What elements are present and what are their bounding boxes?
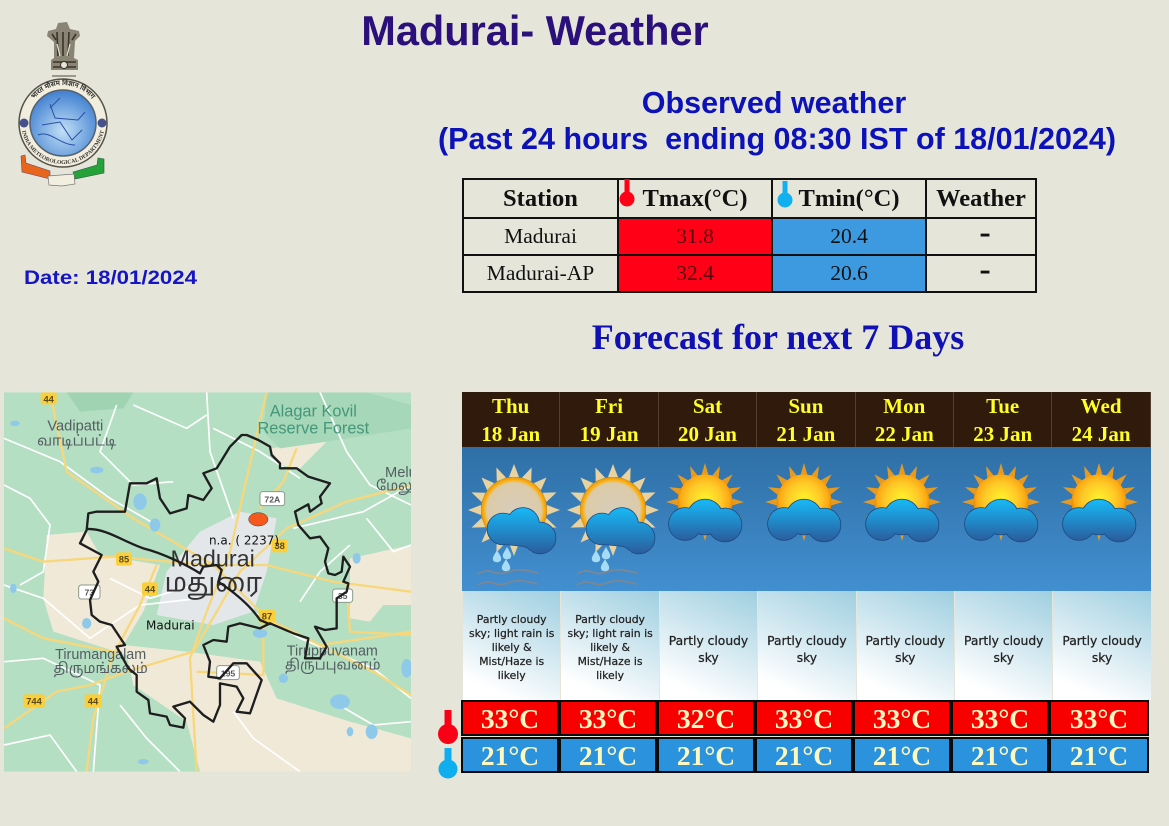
icon: Tue sun and cloud [962,463,1040,542]
max temperature: Sat: 32°C [677,702,735,734]
map of Madurai district: 195 [221,668,235,678]
row: Madurai [462,217,619,256]
min temperature: Tue: 21°C [971,740,1029,770]
map place labels [37,418,421,679]
day header: Thu [462,392,560,447]
map of Madurai district: 85 [119,554,129,564]
heading: forecast: Forecast for next 7 Days [592,317,964,357]
description: Mon: sky [895,650,915,664]
min temperature: Sun: 21°C [775,740,833,770]
max temperature: Mon: 33°C [873,702,931,734]
max temperature: Mon [853,700,951,736]
day header: Fri: Fri [595,394,623,418]
station marker [249,513,268,526]
day header: Tue: 23 Jan [973,422,1032,446]
icon: red thermometer [438,710,458,744]
max temperature: Wed [1049,700,1149,736]
description: Fri: likely [596,668,624,682]
day header: Mon: Mon [883,394,925,418]
map of Madurai district: 35 [338,591,348,601]
logo: India Meteorological Department emblem [18,22,108,186]
day header: Sat: Sat [693,394,722,418]
icon: Mon sun and cloud [863,463,941,542]
min temperature: Sat [657,737,755,773]
max temperature: Fri [559,700,657,736]
day header: Tue: Tue [986,394,1019,418]
max temperature: Thu: 33°C [481,702,539,734]
min temperature: Fri [559,737,657,773]
description: Thu: sky; light rain is [469,626,554,640]
map place labels: Tiruppuvanam [287,644,378,660]
Madurai-AP Tmax: 32.4 [676,261,714,285]
map place labels: மேலூ [376,478,420,496]
station label: n.a. ( 2237) [209,533,279,547]
description: Fri: Partly cloudy [575,612,645,626]
Madurai-AP weather [925,254,1037,293]
icon: Thu sun, cloud, rain, haze [468,464,560,585]
day header: Mon [856,392,954,447]
map place labels: Vadipatti [47,418,103,434]
heading: observed weather: Observed weather [642,86,906,120]
map of Madurai district: Madurai [171,545,255,571]
table header: weather: Weather [936,184,1026,212]
description: Wed: sky [1092,650,1112,664]
table header: station: Station [503,184,578,212]
icon: badge ring and globe: भारत मौसम विज्ञान विभाग [31,78,96,99]
title: Madurai- Weather [361,7,709,54]
Madurai weather: - [979,214,991,250]
description: Tue: Partly cloudy [964,634,1043,648]
min temperature: Wed [1049,737,1149,773]
map of Madurai district: 44 [88,696,99,706]
min temperature: Thu [461,737,559,773]
map of Madurai district: 44 [43,394,55,404]
day header: Wed: Wed [1081,394,1122,418]
icon: orange ribbon [21,155,50,179]
day header: Tue [954,392,1052,447]
icon: Sun sun and cloud [765,463,843,542]
day header: Sun: Sun [788,394,823,418]
description: Sun: Partly cloudy [767,634,847,648]
description: Sat: Partly cloudy [669,634,748,648]
description: Sat [660,591,757,700]
district boundary [80,435,350,728]
description: Thu [463,591,560,700]
max temperature: Fri: 33°C [579,702,637,734]
min temperature: Fri: 21°C [579,740,637,770]
table header: Tmax [617,178,773,219]
map of Madurai district: 38 [274,541,285,551]
description: Tue: sky [994,650,1014,664]
Madurai Tmax: 31.8 [676,224,714,248]
description: Wed: Partly cloudy [1062,634,1142,648]
description: Fri: likely & [590,640,630,654]
Madurai-AP Tmax [617,254,773,293]
max temperature: Sun: 33°C [775,702,833,734]
max temperature: Sat [657,700,755,736]
Madurai Tmax [617,217,773,256]
icon: Wed sun and cloud [1060,463,1138,542]
map of Madurai district: Alagar Kovil [270,403,357,421]
map of Madurai district: மதுரை [165,569,262,602]
description: Fri: Mist/Haze is [578,654,643,668]
description: Fri: sky; light rain is [567,626,653,640]
max temperature: Tue: 33°C [971,702,1029,734]
map of Madurai district: 744 [26,696,43,706]
icon: centre ribbon [48,174,75,186]
row: Madurai: Madurai [504,224,577,248]
description: Thu: likely & [492,640,532,654]
description: Wed [1053,591,1151,700]
day header: Mon: 22 Jan [875,422,934,446]
map place labels: வாடிப்பட்டி [37,434,117,452]
Madurai weather [925,217,1037,256]
map place labels: திருமங்கலம் [54,661,148,679]
icon: Sat sun and cloud [666,463,744,542]
description: Mon: Partly cloudy [866,634,945,648]
description: Thu: likely [498,668,526,682]
day header: Fri [560,392,659,447]
description: Tue [955,591,1052,700]
min temperature: Sat: 21°C [677,740,735,770]
min temperature: Sun [755,737,853,773]
table header: weather [925,178,1037,219]
max temperature: Thu [461,700,559,736]
map of Madurai district: 73 [85,588,94,598]
day header: Thu: Thu [492,394,529,418]
map of Madurai district [4,392,411,772]
Madurai Tmin: 20.4 [830,224,868,248]
day header: Sat: 20 Jan [678,422,737,446]
Madurai-AP weather: - [979,250,991,288]
row: Madurai-AP [462,254,619,293]
map place labels: Melu [385,465,417,481]
map place labels: திருப்புவனம் [285,658,380,676]
observed weather table [462,178,1037,293]
row: Madurai-AP: Madurai-AP [487,261,594,285]
description: Sat: sky [698,650,719,664]
heading: observed weather [438,86,1116,156]
map of Madurai district: 44 [145,584,156,594]
max temperature: Wed: 33°C [1070,702,1128,734]
min temperature: Mon [853,737,951,773]
day header: Sun: 21 Jan [776,422,835,446]
day header: Wed: 24 Jan [1072,422,1131,446]
table header: Tmin: Tmin(°C) [798,184,900,212]
map place labels: Tirumangalam [55,647,146,663]
min temperature: Mon: 21°C [873,740,931,770]
map of Madurai district: 87 [262,612,272,622]
max temperature: Tue [951,700,1049,736]
icon: Fri sun, cloud, rain, haze [567,464,659,585]
icon: badge ring and globe: INDIA METEOROLOGICAL DEPARTMENT [22,130,104,164]
icon: blue thermometer [438,748,458,778]
day header: Wed [1052,392,1151,447]
description: Thu: Partly cloudy [477,612,547,626]
heading: observed weather: (Past 24 hours ending 08:30 IST of 18/01/2024) [438,122,1116,156]
description: Sun [758,591,856,700]
description: Sun: sky [797,650,817,664]
table header: Tmin [771,178,927,219]
min temperature: Thu: 21°C [481,740,539,770]
date: Date: 18/01/2024 [24,268,197,289]
Madurai-AP Tmin: 20.6 [830,261,868,285]
table header: station [462,178,619,219]
map of Madurai district: Reserve Forest [258,419,370,437]
max temperature: Sun [755,700,853,736]
table header: Tmax: Tmax(°C) [642,184,748,212]
icon: blue thermometer in table [778,181,792,208]
icon: national emblem [47,22,80,77]
map of Madurai district: 72A [264,494,281,504]
description: Thu: Mist/Haze is [479,654,544,668]
Madurai Tmin [771,217,927,256]
day header: Thu: 18 Jan [481,422,540,446]
district label: Madurai [146,619,195,633]
icon: badge ring and globe [18,78,108,168]
icon: red thermometer in table [620,179,634,206]
icon: green ribbon [73,158,104,179]
description: Fri [561,591,659,700]
day header: Fri: 19 Jan [580,422,639,446]
min temperature: Wed: 21°C [1070,740,1128,770]
Madurai-AP Tmin [771,254,927,293]
day header: Sun [757,392,856,447]
sky band with weather icons [462,447,1151,591]
min temperature: Tue [951,737,1049,773]
day header: Sat [659,392,757,447]
description: Mon [857,591,954,700]
